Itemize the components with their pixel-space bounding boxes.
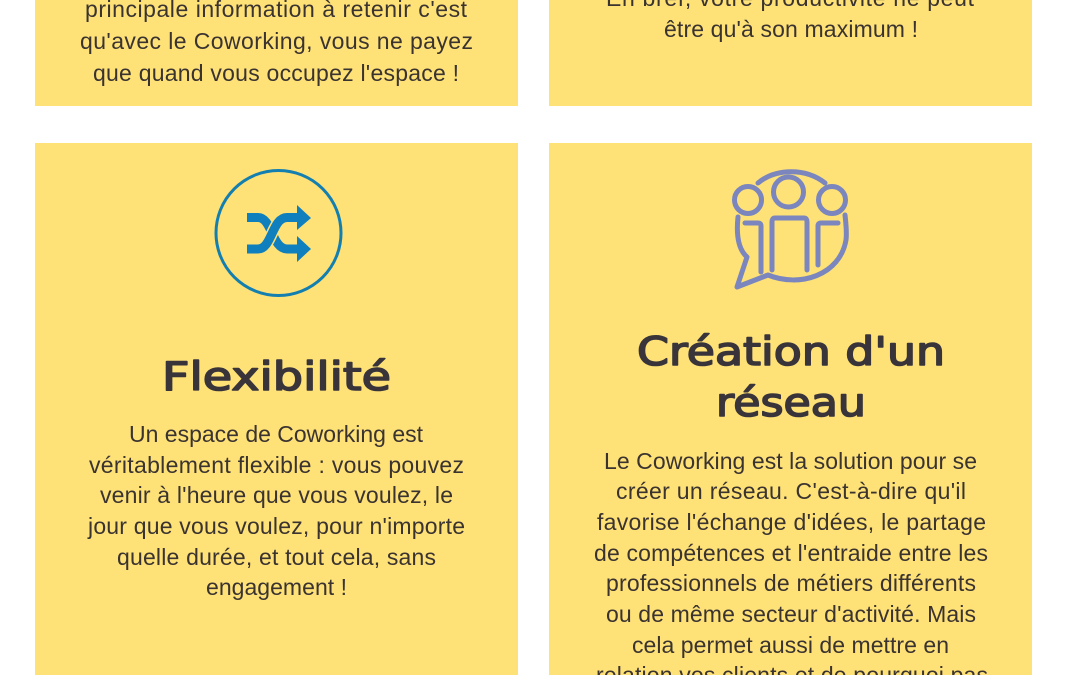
panel: top left card [35,0,518,106]
text: Flexibilité body: engagement ! [206,574,347,600]
text: Création d'un réseau body: ou de même secteur d'activité. Mais [606,601,976,627]
icon: shuffle arrows in circle [216,170,341,296]
text: Flexibilité body: quelle durée, et tout cela, sans [117,544,436,570]
text: top left body: que quand vous occupez l'espace ! [93,60,459,86]
text: top left body [80,0,473,86]
text: Création d'un réseau body: cela permet aussi de mettre en [632,632,949,658]
text: top right body [606,0,975,42]
icon: people in speech bubble [734,172,846,287]
heading: Création d'un réseau [637,330,945,426]
text: Création d'un réseau body: de compétences et l'entraide entre les [594,540,988,566]
text: Flexibilité body: venir à l'heure que vous voulez, le [100,482,453,508]
panel: top right card [549,0,1032,106]
heading: Création d'un réseau: Création d'un [637,330,945,375]
text: Création d'un réseau body [594,448,988,675]
text: top right body: être qu'à son maximum ! [664,16,918,42]
text: Flexibilité body: Un espace de Coworking est [129,421,424,447]
text: Flexibilité body: jour que vous voulez, pour n'importe [87,513,465,539]
text: Création d'un réseau body: professionnels de métiers différents [606,570,976,596]
text: Création d'un réseau body: favorise l'échange d'idées, le partage [597,509,986,535]
text: top left body: qu'avec le Coworking, vous ne payez [80,28,473,54]
text: Création d'un réseau body: créer un réseau. C'est-à-dire qu'il [616,478,966,504]
panel: Création d'un réseau [549,143,1032,675]
text: Flexibilité body: véritablement flexible : vous pouvez [89,452,464,478]
panel: Flexibilité [35,143,518,675]
text: Création d'un réseau body: Le Coworking est la solution pour se [604,448,977,474]
heading: Flexibilité: Flexibilité [162,355,391,400]
text: Flexibilité body [87,421,465,600]
heading: Création d'un réseau: réseau [716,381,866,426]
